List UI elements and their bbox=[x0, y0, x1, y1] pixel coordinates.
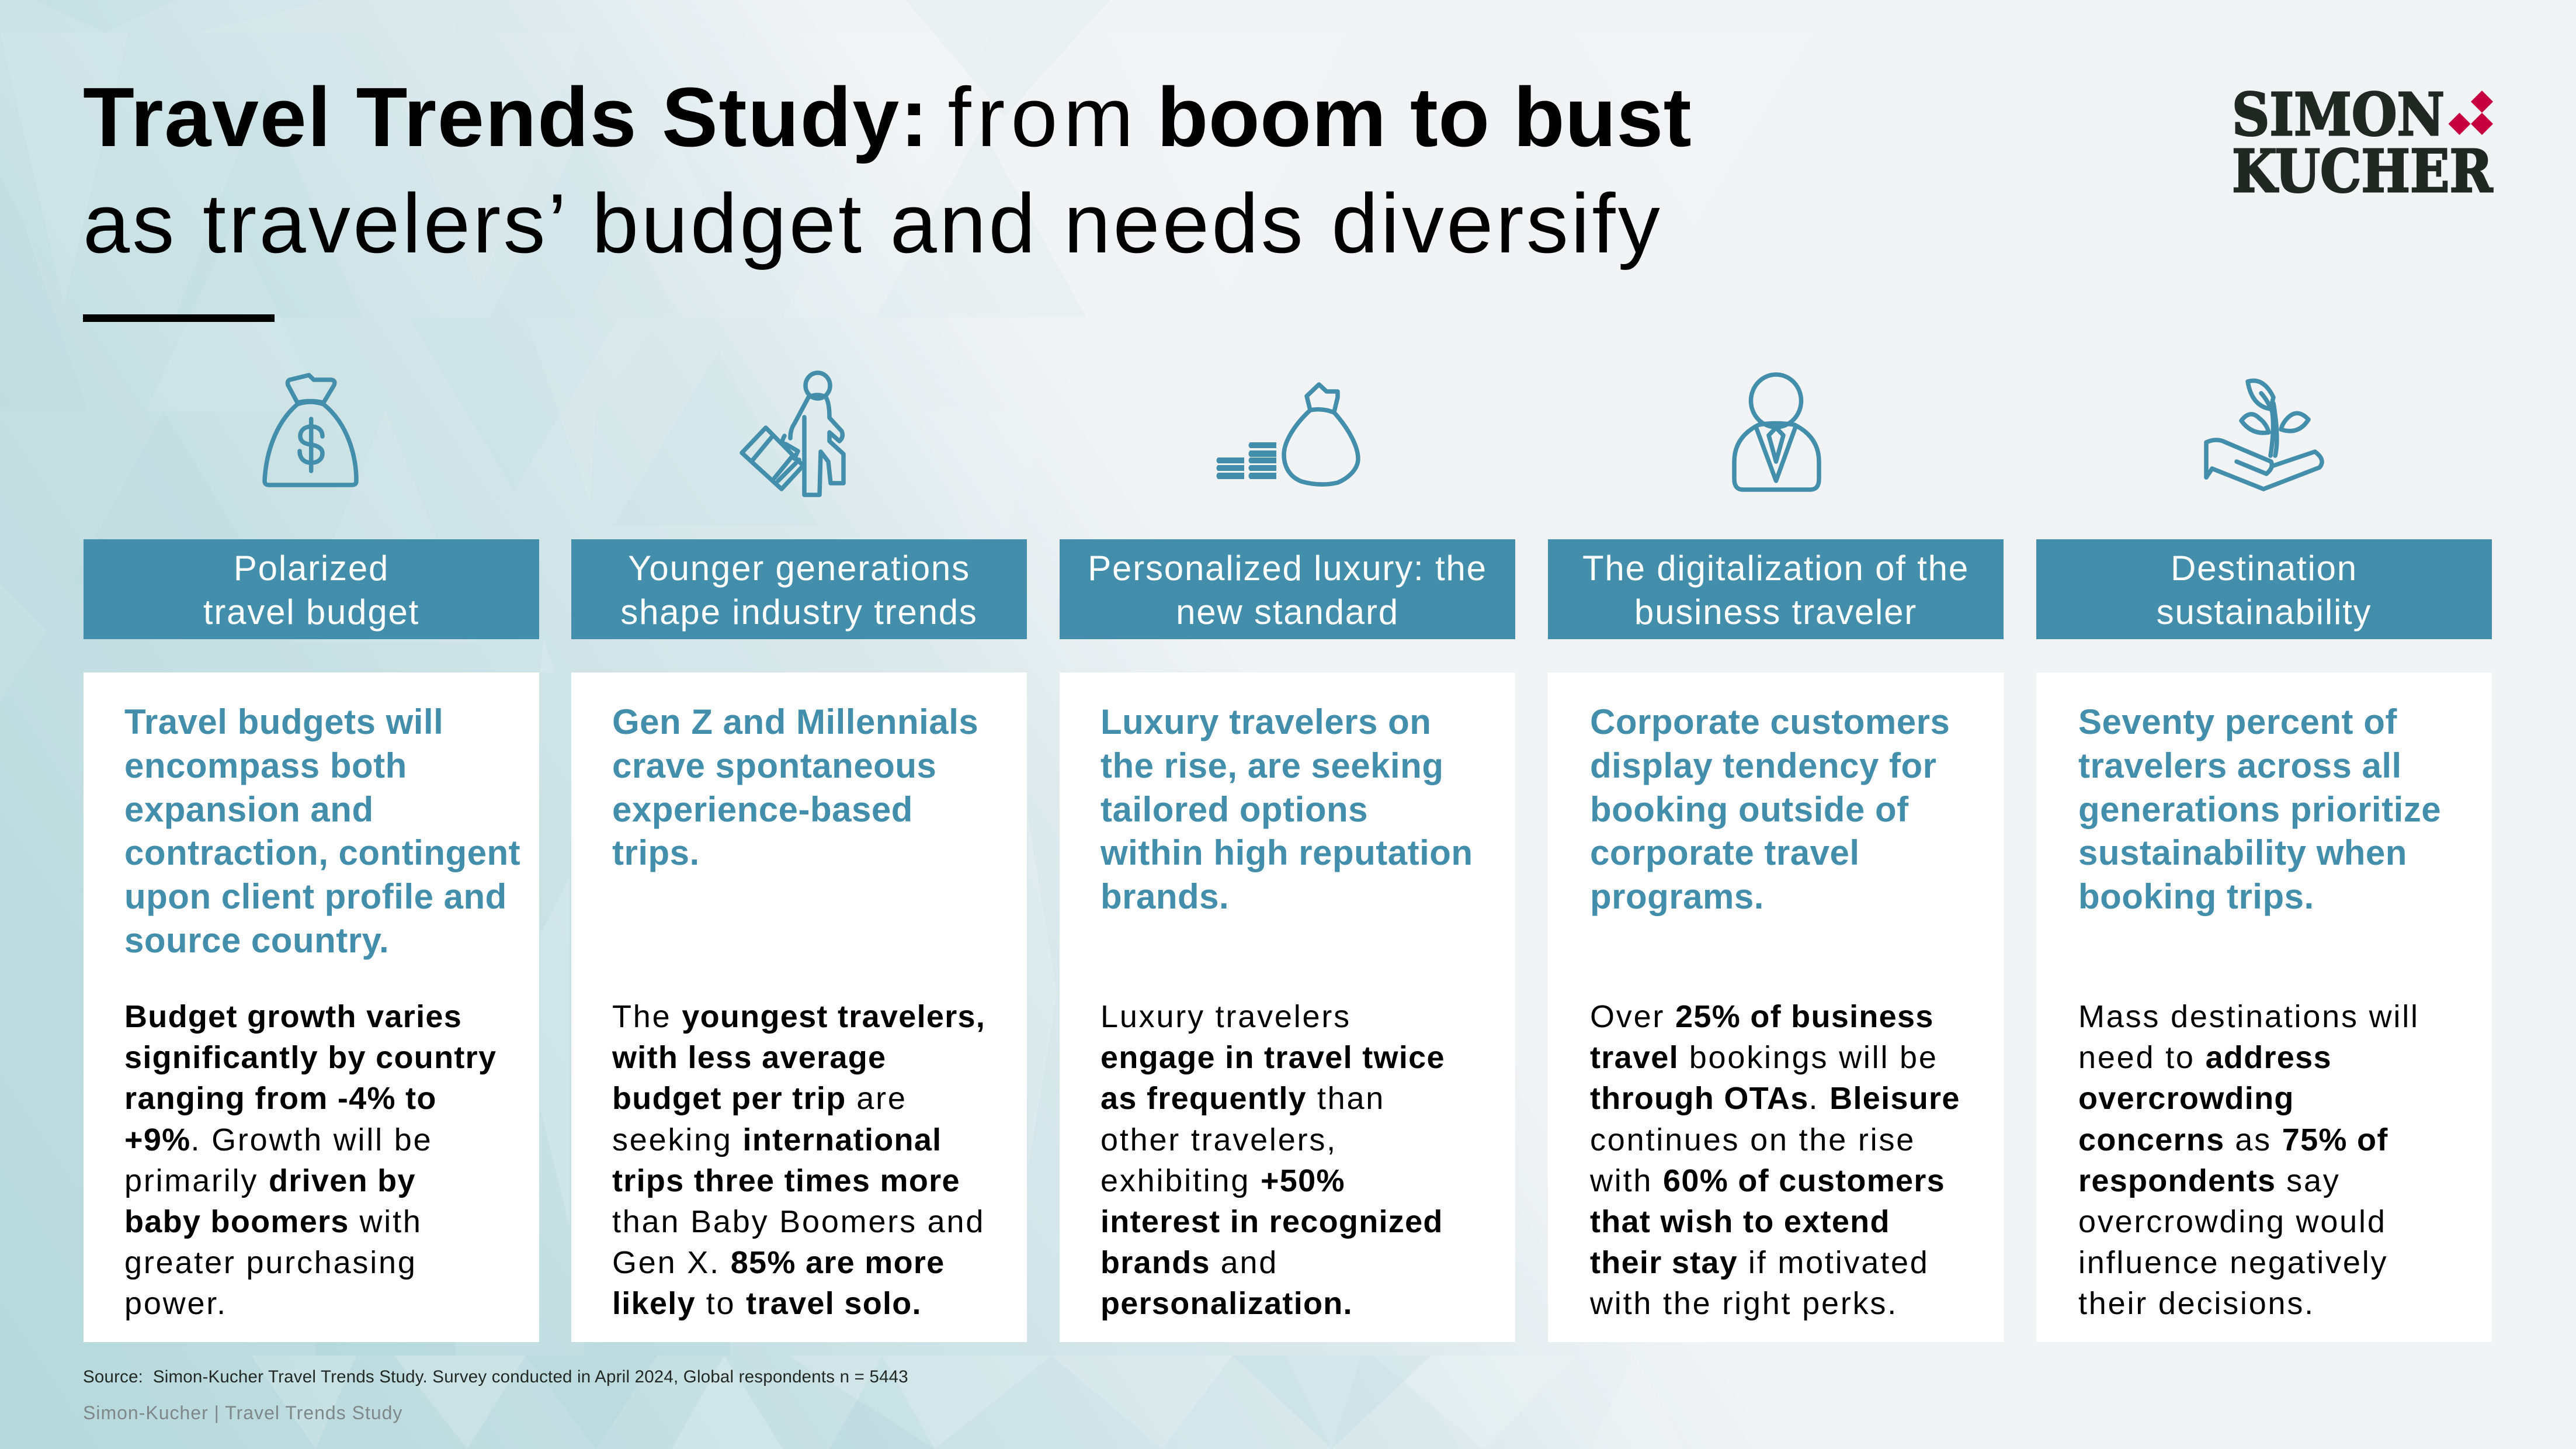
title: as travelers’ budget and needs diversify bbox=[83, 176, 1662, 271]
panel: younger generations bbox=[571, 672, 1027, 1342]
body text: brands and bbox=[1100, 1245, 1278, 1280]
title bbox=[83, 70, 1692, 271]
heading bbox=[1100, 701, 1473, 919]
panel: destination sustainability bbox=[2036, 672, 2492, 1342]
body text: significantly by country bbox=[124, 1040, 497, 1075]
icon: traveler with suitcase bbox=[742, 373, 843, 495]
icons row bbox=[262, 370, 2324, 497]
source note: Source: Simon-Kucher Travel Trends Study. Survey conducted in April 2024, Global respondents n = 5443 bbox=[83, 1367, 908, 1386]
body text: Budget growth varies bbox=[124, 999, 462, 1034]
body text: respondents say bbox=[2078, 1163, 2341, 1198]
panel: polarized travel budget bbox=[84, 672, 539, 1342]
heading: the rise, are seeking bbox=[1100, 746, 1443, 785]
heading: Luxury travelers on bbox=[1100, 702, 1431, 741]
heading: travelers across all bbox=[2078, 746, 2402, 785]
heading: Gen Z and Millennials bbox=[612, 702, 978, 741]
body text: Gen X. 85% are more bbox=[612, 1245, 945, 1280]
body text: with the right perks. bbox=[1590, 1286, 1898, 1321]
header: digitalization: The digitalization of the bbox=[1582, 549, 1969, 588]
title: Travel Trends Study: from boom to bust bbox=[83, 70, 1692, 164]
body text: Luxury travelers bbox=[1100, 999, 1351, 1034]
header: Personalized luxury: Personalized luxury: the bbox=[1088, 549, 1487, 588]
body text bbox=[2078, 996, 2419, 1325]
body text: interest in recognized bbox=[1100, 1204, 1443, 1239]
body text: power. bbox=[124, 1286, 227, 1321]
header: Destination sustainability bbox=[2036, 539, 2492, 639]
body text: primarily driven by bbox=[124, 1163, 416, 1198]
footer: Simon-Kucher | Travel Trends Study bbox=[83, 1402, 402, 1423]
icon: business person bbox=[1734, 375, 1819, 490]
heading: Travel budgets will bbox=[124, 702, 443, 741]
body text: their stay if motivated bbox=[1590, 1245, 1929, 1280]
logo: Simon-Kucher bbox=[2232, 80, 2494, 204]
body text: trips three times more bbox=[612, 1163, 960, 1198]
body text: through OTAs. Bleisure bbox=[1590, 1081, 1960, 1116]
body text: The youngest travelers, bbox=[612, 999, 985, 1034]
body text bbox=[1590, 996, 1960, 1325]
panel: personalized luxury bbox=[1060, 672, 1515, 1342]
body text: Mass destinations will bbox=[2078, 999, 2419, 1034]
heading: contraction, contingent bbox=[124, 833, 520, 872]
header: Polarized travel budget: Polarized bbox=[234, 549, 389, 588]
heading: sustainability when bbox=[2078, 833, 2407, 872]
heading: brands. bbox=[1100, 877, 1229, 916]
body text: ranging from -4% to bbox=[124, 1081, 437, 1116]
body text: +9%. Growth will be bbox=[124, 1122, 432, 1157]
panel: digital business traveler bbox=[1548, 672, 2004, 1342]
heading: display tendency for bbox=[1590, 746, 1936, 785]
body text: with less average bbox=[612, 1040, 886, 1075]
heading: Corporate customers bbox=[1590, 702, 1950, 741]
body text: budget per trip are bbox=[612, 1081, 907, 1116]
body text: seeking international bbox=[612, 1122, 942, 1157]
heading: booking trips. bbox=[2078, 877, 2314, 916]
body text: baby boomers with bbox=[124, 1204, 422, 1239]
body text: Over 25% of business bbox=[1590, 999, 1934, 1034]
header: Younger generations: shape industry trends bbox=[620, 592, 978, 632]
title underline bbox=[83, 314, 275, 322]
heading: upon client profile and bbox=[124, 877, 507, 916]
heading: source country. bbox=[124, 921, 389, 960]
body text bbox=[612, 999, 985, 1321]
heading: trips. bbox=[612, 833, 700, 872]
header: Younger generations: Younger generations bbox=[628, 549, 970, 588]
header: digitalization: business traveler bbox=[1634, 592, 1917, 632]
body text: engage in travel twice bbox=[1100, 1040, 1445, 1075]
icon: money bag with dollar bbox=[265, 375, 356, 485]
header: Personalized luxury bbox=[1060, 539, 1515, 639]
header: Younger generations bbox=[571, 539, 1027, 639]
heading bbox=[1590, 701, 1950, 919]
header: Personalized luxury: new standard bbox=[1176, 592, 1399, 632]
body text: exhibiting +50% bbox=[1100, 1163, 1345, 1198]
body text: than Baby Boomers and bbox=[612, 1204, 985, 1239]
heading: crave spontaneous bbox=[612, 746, 936, 785]
body text: as frequently than bbox=[1100, 1081, 1385, 1116]
header: Polarized travel budget bbox=[84, 539, 539, 639]
heading: expansion and bbox=[124, 790, 374, 829]
heading: experience-based bbox=[612, 790, 913, 829]
body text: influence negatively bbox=[2078, 1245, 2388, 1280]
heading bbox=[2078, 701, 2441, 919]
heading: Seventy percent of bbox=[2078, 702, 2397, 741]
heading bbox=[124, 702, 520, 960]
heading: generations prioritize bbox=[2078, 790, 2441, 829]
body text bbox=[1100, 996, 1445, 1325]
body text: overcrowding would bbox=[2078, 1204, 2387, 1239]
icon: coins and money bag bbox=[1216, 384, 1358, 484]
body text: overcrowding bbox=[2078, 1081, 2294, 1116]
body text: concerns as 75% of bbox=[2078, 1122, 2388, 1157]
body text: continues on the rise bbox=[1590, 1122, 1915, 1157]
body text: personalization. bbox=[1100, 1286, 1353, 1321]
body text bbox=[124, 999, 497, 1321]
header: Destination sustainability: sustainability bbox=[2157, 592, 2372, 632]
body text: with 60% of customers bbox=[1590, 1163, 1945, 1198]
heading bbox=[612, 702, 978, 872]
body text: that wish to extend bbox=[1590, 1204, 1890, 1239]
heading: tailored options bbox=[1100, 790, 1368, 829]
header: digitalization bbox=[1548, 539, 2004, 639]
heading: within high reputation bbox=[1100, 833, 1473, 872]
icon: hand holding plant bbox=[2206, 381, 2322, 489]
body text: need to address bbox=[2078, 1040, 2332, 1075]
heading: encompass both bbox=[124, 746, 407, 785]
body text: travel bookings will be bbox=[1590, 1040, 1938, 1075]
heading: programs. bbox=[1590, 877, 1764, 916]
heading: booking outside of bbox=[1590, 790, 1909, 829]
header: Polarized travel budget: travel budget bbox=[203, 592, 419, 632]
body text: likely to travel solo. bbox=[612, 1286, 922, 1321]
header: Destination sustainability: Destination bbox=[2171, 549, 2358, 588]
body text: greater purchasing bbox=[124, 1245, 417, 1280]
heading: corporate travel bbox=[1590, 833, 1860, 872]
body text: their decisions. bbox=[2078, 1286, 2315, 1321]
logo: Simon-Kucher: SIMON bbox=[2232, 80, 2445, 149]
body text: other travelers, bbox=[1100, 1122, 1337, 1157]
